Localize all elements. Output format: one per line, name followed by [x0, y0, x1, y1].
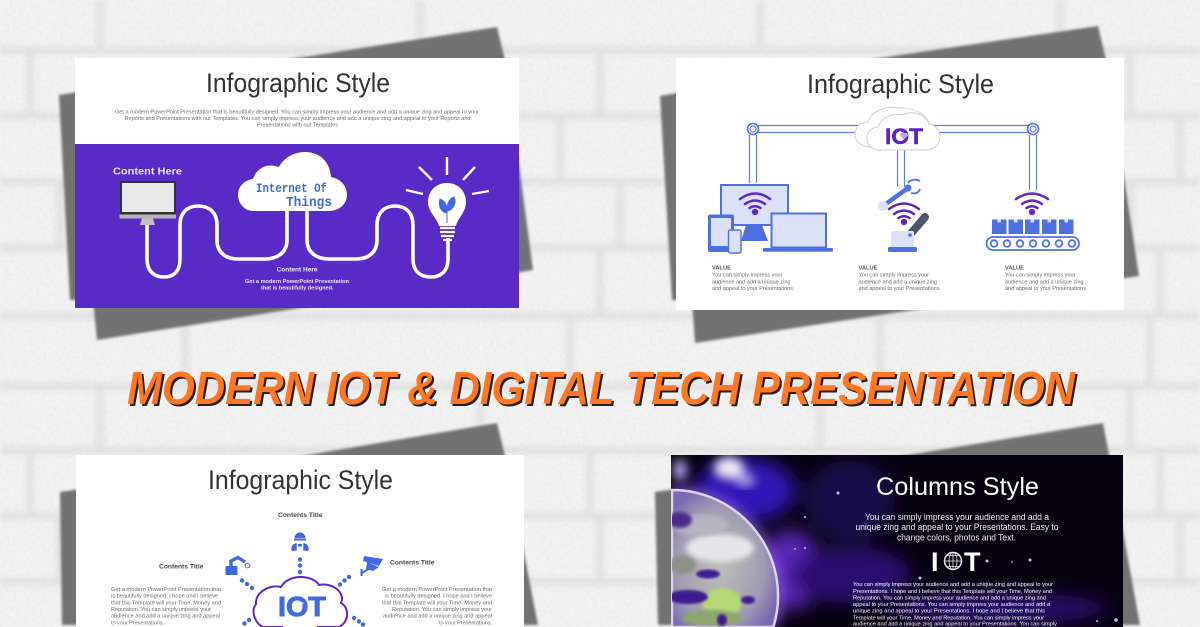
value text 2: You can simply impress your: [858, 273, 929, 279]
contents title top: Contents Title: [278, 512, 323, 519]
right paragraph: is beautifully designed. I hope and I believe: [385, 594, 492, 600]
left paragraph: to your Presentations.: [111, 620, 164, 626]
value text 2: audience and add a unique zing: [858, 279, 937, 285]
value text 3: and appeal to your Presentations.: [1005, 286, 1088, 292]
contents title left: Contents Title: [159, 564, 204, 571]
intro text: [115, 110, 479, 129]
caption: [245, 266, 350, 292]
value text 1: VALUE: [712, 266, 731, 272]
intro paragraph: unique zing and appeal to your Presentations. Easy to: [856, 522, 1058, 532]
icon: cloud: Things: [286, 195, 332, 211]
value text 2: VALUE: [858, 266, 878, 272]
caption: Get a modern PowerPoint Presentation: [245, 279, 350, 285]
left paragraph: that this Template will your Time, Money and: [111, 600, 221, 606]
purple band: [75, 144, 519, 308]
body text: [853, 582, 1057, 627]
icon: IOT logo white: [932, 552, 980, 571]
value text 1: and appeal to your Presentations.: [712, 286, 794, 292]
icon: monitor: [120, 181, 176, 225]
panel: columns style space photo: [668, 455, 1123, 627]
icon: worker: [292, 532, 308, 550]
icon: security camera: [360, 556, 383, 576]
connector pipes: [748, 124, 1038, 190]
heading: Infographic Style: [208, 465, 393, 495]
content label: Content Here: [113, 166, 182, 178]
value text 3: You can simply impress your: [1005, 273, 1076, 279]
left paragraph: [111, 587, 222, 626]
caption: Content Here: [276, 266, 318, 274]
body text: You can simply impress your audience and add a unique zing and appeal to your: [853, 582, 1053, 588]
icon: devices: [708, 185, 833, 253]
icon: industrial robot: [226, 558, 250, 575]
body text: Reputation. You can simply impress your audience and add a unique zing and: [853, 596, 1046, 602]
cable: [147, 205, 448, 277]
body text: appeal to your Presentations. You can simply impress your audience and add a: [853, 602, 1050, 608]
value text 1: You can simply impress your: [712, 273, 783, 279]
icon: IOT cloud: [855, 107, 940, 150]
white header: [75, 58, 519, 144]
body text: unique zing and appeal to your Presentations. I hope and I believe that this: [853, 609, 1045, 615]
icon: IOT logo white: I: [931, 547, 939, 577]
heading: Infographic Style: [206, 68, 390, 98]
value text 2: [858, 266, 941, 292]
contents title right: Contents Title: [390, 560, 435, 567]
connector dots: [240, 557, 365, 627]
icon: earth: [668, 484, 784, 627]
icon: cloud: [238, 152, 347, 211]
right paragraph: Reputation. You can simply impress your: [392, 607, 492, 613]
intro paragraph: [856, 512, 1058, 542]
left paragraph: is beautifully designed. I hope and I believe: [111, 594, 218, 600]
icon: IOT logo white: T: [964, 547, 981, 577]
right paragraph: Get a modern PowerPoint Presentation that: [382, 587, 493, 593]
value text 1: audience and add a unique zing: [712, 279, 790, 285]
icon: IOT cloud outline: [254, 577, 347, 627]
value text 3: audience and add a unique zing: [1005, 279, 1084, 285]
left paragraph: audience and add a unique zing and appeal: [111, 614, 220, 620]
right paragraph: [382, 587, 493, 626]
intro paragraph: change colors, photos and Text.: [897, 532, 1016, 542]
icon: IOT cloud: IOT: [885, 124, 924, 149]
right paragraph: that this Template will your Time, Money and: [382, 600, 492, 606]
stars: [794, 492, 1118, 622]
intro paragraph: You can simply impress your audience and add a: [865, 512, 1050, 522]
icon: light bulb: [406, 157, 489, 240]
main title: MODERN IOT & DIGITAL TECH PRESENTATION: [127, 362, 1076, 414]
heading: Infographic Style: [807, 69, 994, 99]
intro text: Get a modern PowerPoint Presentation that is beautifully designed. You can simply impress your audience and add a unique zing and appeal to your: [115, 110, 479, 116]
right paragraph: audience and add a unique zing and appeal: [383, 614, 492, 620]
body text: Template will your Time, Money and Reputation. You can simply impress your: [853, 616, 1044, 622]
main title: MODERN IOT & DIGITAL TECH PRESENTATION: [129, 364, 1078, 416]
caption: that is beautifully designed.: [261, 286, 334, 292]
left paragraph: Get a modern PowerPoint Presentation that: [111, 587, 222, 593]
panel: IOT hub: [76, 455, 524, 627]
icon: cloud: Internet Of: [256, 181, 327, 196]
heading: Columns Style: [876, 473, 1039, 501]
panel: internet of things cable: [75, 58, 519, 308]
value text 2: and appeal to your Presentations.: [858, 286, 941, 292]
intro text: Presentations with our Templates: [257, 123, 338, 129]
value text 1: [712, 266, 794, 292]
body text: Presentations. I hope and I believe that this Template will your Time, Money and: [853, 589, 1052, 595]
intro text: Reports and Presentations with our Templates. You can simply impress your audience and add a unique zing and appeal to your Reports and: [124, 116, 470, 122]
icon: robot arm: [878, 180, 925, 252]
value text 3: [1005, 266, 1088, 292]
left paragraph: Reputation. You can simply impress your: [111, 607, 211, 613]
right paragraph: to your Presentations.: [439, 620, 492, 626]
panel: IOT network: [676, 58, 1124, 310]
value text 3: VALUE: [1005, 266, 1024, 272]
icon: conveyor belt: [986, 194, 1079, 250]
icon: IOT cloud outline: IOT: [278, 591, 326, 622]
nebula glow: [673, 457, 1110, 623]
